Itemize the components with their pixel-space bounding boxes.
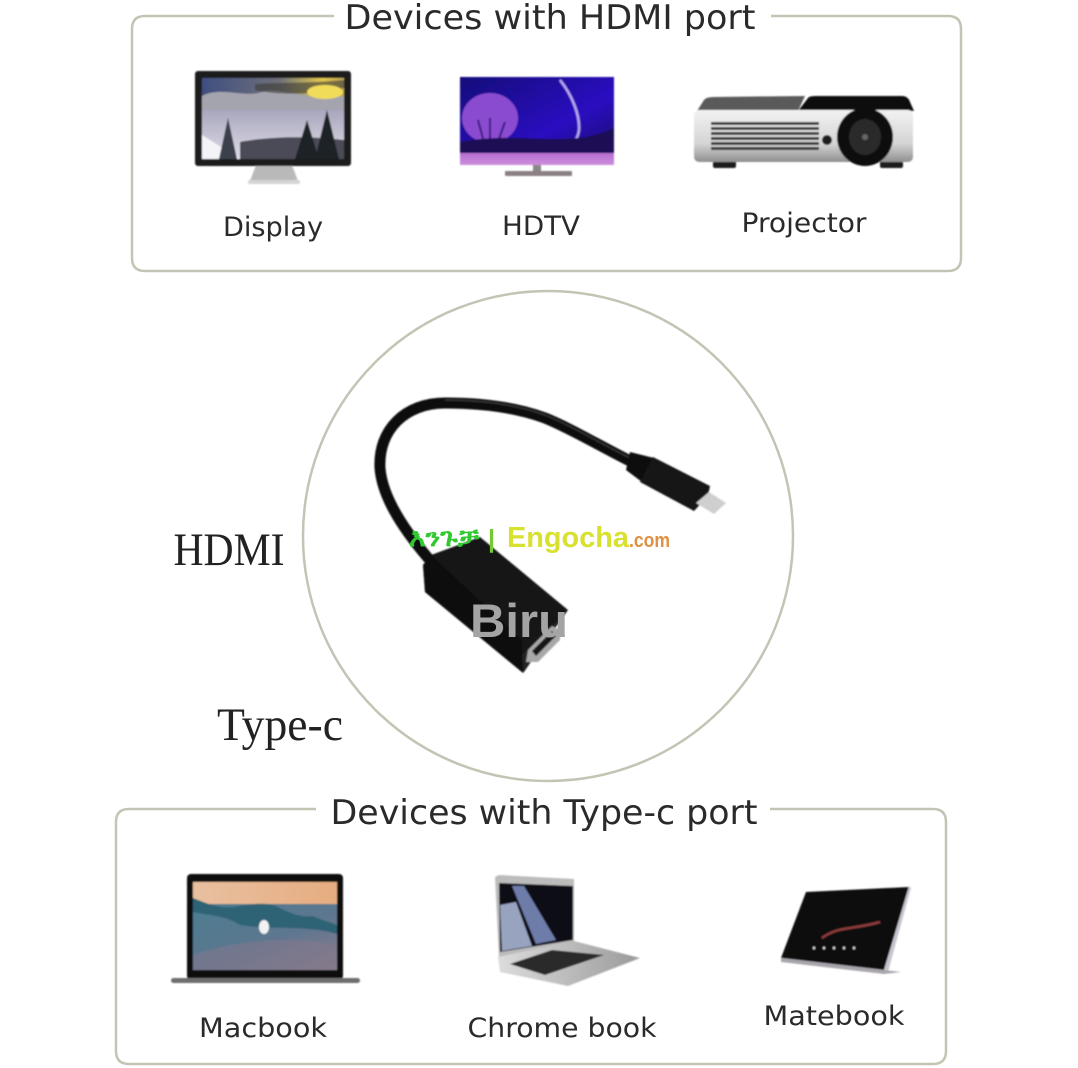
watermark: Engocha.com: Engocha — [507, 522, 630, 554]
circle frame — [303, 291, 793, 781]
icon: HDTV — [460, 77, 614, 176]
label: Matebook: Matebook — [764, 1001, 905, 1032]
label: HDMI: HDMI — [174, 524, 284, 576]
label: Display: Display — [223, 212, 323, 243]
icon: Macbook — [171, 874, 360, 983]
panel: devices with HDMI port — [132, 0, 961, 271]
label: HDTV: HDTV — [502, 211, 581, 242]
heading: Devices with Type-c port: Devices with Type-c port — [330, 793, 758, 833]
icon: Chrome book — [495, 875, 640, 986]
watermark: Engocha.com: .com — [629, 530, 670, 552]
label: Type-c: Type-c — [217, 699, 343, 751]
label: Projector: Projector — [742, 208, 867, 239]
icon: display monitor — [195, 71, 351, 184]
icon: Matebook — [781, 886, 911, 974]
panel: devices with Type-c port — [116, 793, 946, 1064]
product: USB-C to HDMI adapter — [380, 400, 726, 673]
watermark: Engocha.com — [409, 522, 670, 554]
icon: projector — [694, 96, 914, 168]
watermark: Biru: Biru — [470, 594, 568, 647]
watermark: Engocha.com: | — [488, 525, 495, 553]
label: Chrome book: Chrome book — [468, 1013, 657, 1044]
watermark: Engocha.com: እንጉቻ — [409, 524, 480, 552]
label: Macbook: Macbook — [199, 1013, 327, 1044]
